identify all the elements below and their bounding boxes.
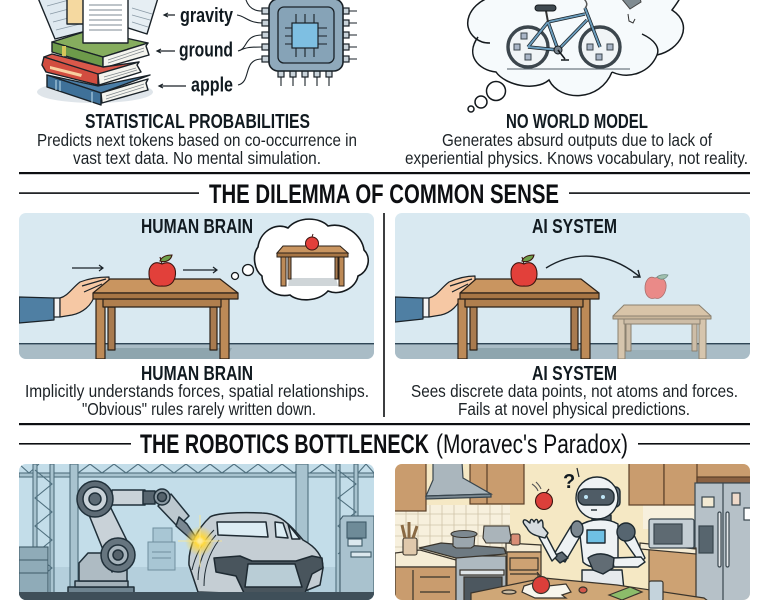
- icon: faded falling apple: [645, 275, 668, 298]
- pot, toaster and utensils: [402, 522, 520, 555]
- text: statistical description: vast text data. No mental simulation.: [73, 148, 321, 168]
- question and exclamation marks: [564, 468, 580, 488]
- microwave: [649, 519, 694, 548]
- icon: faded destination table: [613, 305, 711, 359]
- section heading: the robotics bottleneck: (Moravec's Paradox): [436, 429, 628, 459]
- question and exclamation marks: ?: [563, 471, 575, 493]
- heading: human brain explanation: HUMAN BRAIN: [141, 363, 253, 385]
- heading: AI system explanation: AI SYSTEM: [532, 363, 617, 385]
- text: no world model description: [405, 130, 748, 168]
- label: apple with arrow: apple: [191, 74, 233, 96]
- label: ground with arrow: ground: [179, 40, 233, 62]
- fridge: [695, 483, 752, 600]
- text: AI system description: Fails at novel physical predictions.: [458, 399, 690, 419]
- icon: hand pushing table: [395, 276, 475, 322]
- icon: red apple on table: [511, 255, 537, 286]
- icon: microchip with traces: [237, 0, 357, 86]
- panel: factory robot welding car: [19, 464, 374, 600]
- icon: thought bubble with bicycle: [468, 0, 683, 112]
- icon: hand pushing table: [19, 277, 109, 323]
- upper cabinets: [394, 462, 751, 511]
- panel: no world model: [405, 0, 748, 168]
- text: human brain description: [25, 381, 369, 419]
- icon: wooden table: [458, 279, 599, 359]
- counter, stove and lower cabinets: [395, 543, 696, 600]
- control console: [340, 516, 374, 600]
- panel: robot in kitchen: [394, 462, 752, 600]
- humanoid robot with question mark: [523, 477, 645, 590]
- icon: stack of books and papers: [37, 0, 158, 105]
- text: no world model description: Generates absurd outputs due to lack of: [442, 130, 712, 150]
- text: statistical description: Predicts next tokens based on co-occurrence in: [37, 130, 357, 150]
- icon: red apple: [149, 255, 176, 286]
- panel: AI system scene: [395, 213, 750, 359]
- icon: falling apple: [532, 482, 552, 510]
- factory floor rail: [19, 592, 374, 600]
- tool cart: [148, 528, 175, 570]
- icon: wooden table: [93, 279, 238, 359]
- heading: statistical probabilities: STATISTICAL PROBABILITIES: [85, 111, 310, 133]
- text: human brain description: Implicitly understands forces, spatial relationships.: [25, 381, 369, 401]
- welding spark: [178, 515, 222, 567]
- section heading: the dilemma of common sense: THE DILEMMA OF COMMON SENSE: [209, 179, 559, 209]
- factory bench left: [19, 547, 48, 600]
- industrial robot arm: [68, 481, 197, 600]
- kitchen island with spill: [471, 572, 708, 600]
- thought bubble: imagined table and apple: [232, 219, 368, 300]
- label: gravity with arrow: [164, 5, 234, 27]
- panel: statistical probabilities: [37, 0, 357, 168]
- panel: human brain scene: [19, 213, 374, 359]
- text: AI system description: [411, 381, 738, 419]
- arrows: push direction: [72, 265, 217, 273]
- text: human brain description: "Obvious" rules rarely written down.: [82, 399, 316, 419]
- text: statistical description: [37, 130, 357, 168]
- label: ground with arrow: [157, 40, 233, 62]
- tile backsplash: [395, 505, 698, 553]
- label: AI system: AI SYSTEM: [532, 216, 617, 238]
- section heading: the robotics bottleneck: [19, 429, 750, 459]
- arrow: predicted trajectory: [546, 256, 640, 277]
- range hood: [426, 462, 491, 499]
- heading: no world model: NO WORLD MODEL: [506, 111, 648, 133]
- label: gravity with arrow: gravity: [180, 5, 234, 27]
- label: human brain: HUMAN BRAIN: [141, 216, 253, 238]
- section heading: the robotics bottleneck: THE ROBOTICS BOTTLENECK: [140, 429, 429, 459]
- factory structure: trusses and columns: [19, 464, 374, 600]
- car body shell: [189, 513, 323, 593]
- label: apple with arrow: [159, 74, 233, 96]
